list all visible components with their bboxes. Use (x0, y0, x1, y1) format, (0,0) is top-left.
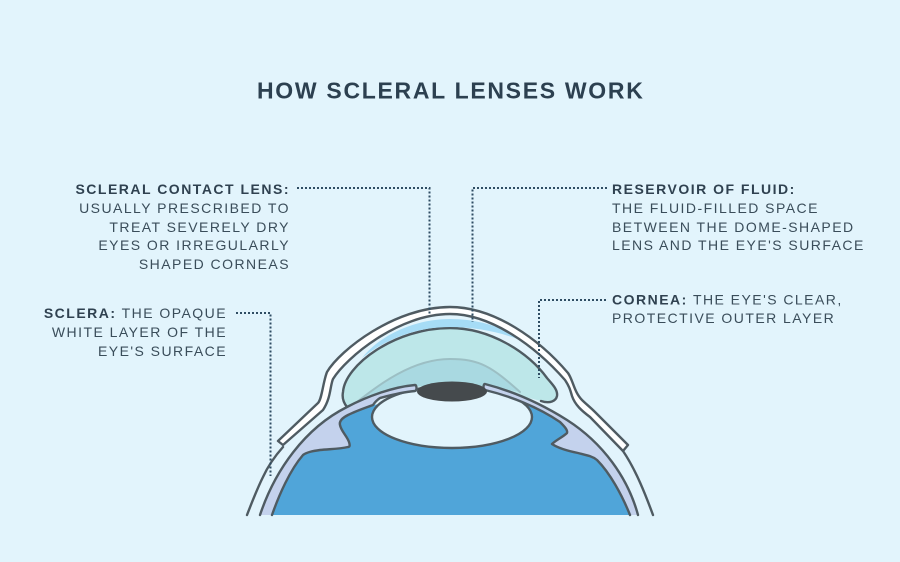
eye interior: blue vitreous (272, 390, 630, 515)
text block: sclera: EYE'S SURFACE (98, 343, 227, 359)
sclera left: fill (260, 385, 416, 515)
text block: sclera: WHITE LAYER OF THE (52, 324, 227, 340)
outer eye line right (623, 451, 653, 515)
text block: reservoir of fluid (612, 181, 865, 253)
inner fluid outline (353, 359, 520, 405)
text block: reservoir of fluid: THE FLUID-FILLED SPACE (612, 200, 819, 216)
text block: cornea (612, 292, 843, 326)
text block: sclera (44, 305, 227, 359)
text block: reservoir of fluid: RESERVOIR OF FLUID: (612, 181, 796, 197)
iris (417, 382, 487, 402)
text block: scleral contact lens: SHAPED CORNEAS (139, 256, 290, 272)
eye diagram (247, 307, 653, 515)
sclera right: fill (484, 384, 638, 515)
sclera right: outline (484, 384, 638, 515)
sclera left: outline (260, 385, 416, 515)
text block: scleral contact lens: SCLERAL CONTACT LENS: (75, 181, 290, 197)
leader: scleral contact lens (297, 188, 430, 314)
title: HOW SCLERAL LENSES WORK (257, 78, 645, 104)
text block: scleral contact lens (75, 181, 290, 272)
reservoir: darker inner fluid (353, 359, 520, 405)
text block: scleral contact lens: EYES OR IRREGULARLY (98, 237, 290, 253)
text block: scleral contact lens: USUALLY PRESCRIBED TO (79, 200, 290, 216)
leader: reservoir of fluid (472, 188, 607, 322)
text block: scleral contact lens: TREAT SEVERELY DRY (109, 219, 290, 235)
text block: cornea: CORNEA: THE EYE'S CLEAR, (612, 292, 843, 308)
text block: reservoir of fluid: BETWEEN THE DOME-SHAPED (612, 219, 855, 235)
text block: sclera: SCLERA: THE OPAQUE (44, 305, 227, 321)
text block: cornea: PROTECTIVE OUTER LAYER (612, 310, 835, 326)
leader: cornea (539, 300, 606, 378)
reservoir of fluid: teal fill (343, 328, 557, 407)
outer eye line left (247, 447, 283, 515)
scleral lens band (278, 307, 628, 451)
crystalline lens (372, 386, 532, 448)
crescent of fluid under lens (362, 319, 520, 358)
text block: reservoir of fluid: LENS AND THE EYE'S SURFACE (612, 237, 865, 253)
reservoir outline (343, 328, 557, 407)
leader: sclera (236, 313, 270, 476)
